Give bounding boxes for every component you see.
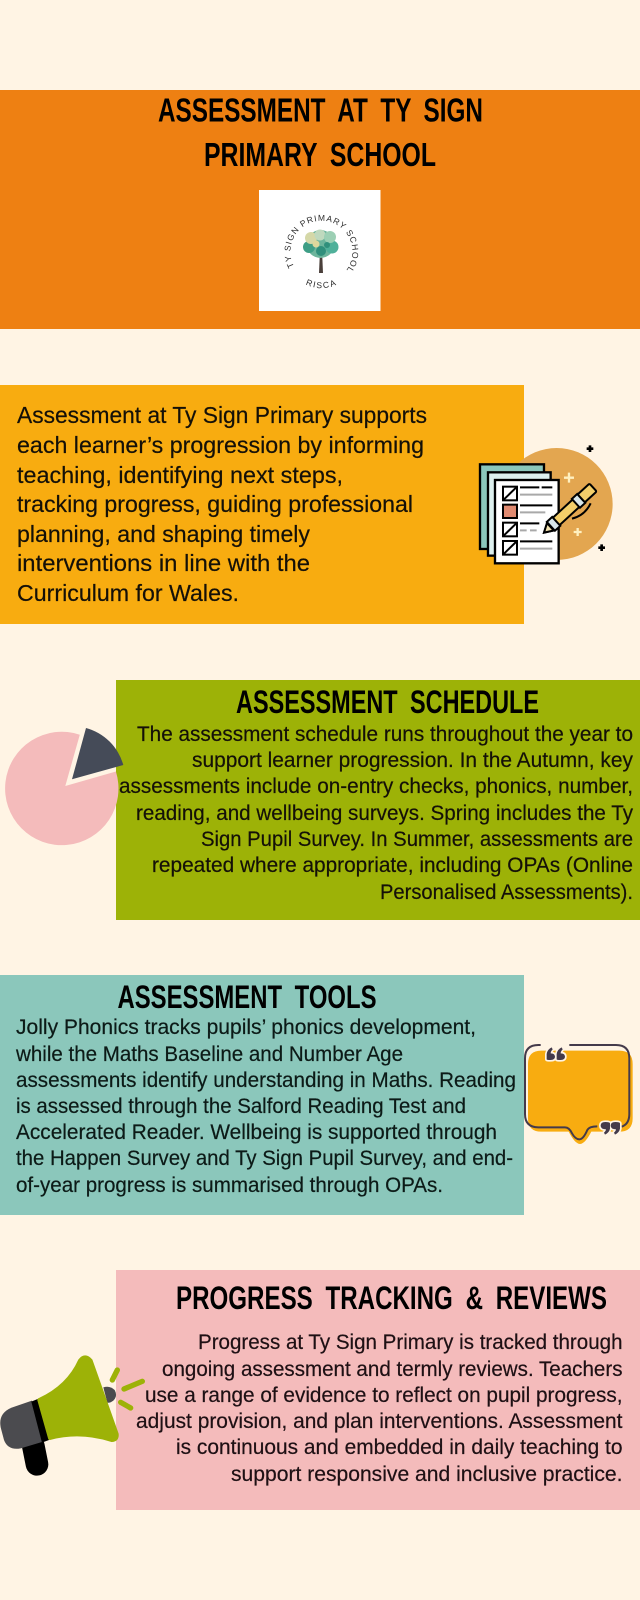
icon: megaphone	[0, 1357, 142, 1464]
tools text: while the Maths Baseline and Number Age	[15, 1043, 403, 1066]
chart: pie chart	[5, 728, 123, 845]
schedule text: assessments include on-entry checks, phonics, number,	[119, 775, 633, 798]
intro text: interventions in line with the	[17, 550, 310, 576]
progress text: adjust provision, and plan interventions. Assessment	[136, 1410, 623, 1433]
icon: tree	[303, 230, 338, 273]
school logo	[259, 190, 380, 311]
title: ASSESSMENT AT TY SIGN	[158, 92, 483, 130]
panel: progress tracking and reviews	[116, 1270, 640, 1510]
schedule text	[119, 723, 633, 904]
intro text: Curriculum for Wales.	[17, 580, 239, 606]
title: PRIMARY SCHOOL	[204, 137, 436, 174]
tools text: Jolly Phonics tracks pupils’ phonics development,	[16, 1016, 476, 1039]
tools text: Accelerated Reader. Wellbeing is supported through	[16, 1121, 497, 1144]
tools text: assessments identify understanding in Maths. Reading	[16, 1069, 516, 1092]
intro text: planning, and shaping timely	[17, 521, 310, 547]
heading: ASSESSMENT TOOLS	[118, 979, 376, 1015]
progress text: is continuous and embedded in daily teaching to	[176, 1436, 622, 1459]
intro text: each learner’s progression by informing	[17, 432, 424, 458]
intro text	[17, 402, 427, 606]
progress text: ongoing assessment and termly reviews. Teachers	[162, 1358, 622, 1381]
school logo: TY SIGN PRIMARY SCHOOL	[284, 214, 358, 270]
schedule text: Personalised Assessments).	[380, 881, 633, 904]
panel: assessment tools	[0, 975, 524, 1215]
panel: assessment schedule	[116, 680, 640, 920]
tools text: is assessed through the Salford Reading Test and	[16, 1095, 466, 1118]
progress text: use a range of evidence to reflect on pupil progress,	[145, 1384, 622, 1407]
tools text	[15, 1016, 516, 1197]
schedule text: The assessment schedule runs throughout the year to	[137, 723, 633, 746]
intro text: Assessment at Ty Sign Primary supports	[17, 402, 427, 428]
schedule text: support learner progression. In the Autumn, key	[192, 749, 633, 772]
panel: title banner	[0, 90, 640, 329]
tools text: of-year progress is summarised through OPAs.	[16, 1174, 443, 1197]
school logo: RISCA	[306, 279, 336, 288]
title	[158, 92, 483, 174]
schedule text: Sign Pupil Survey. In Summer, assessments are	[201, 828, 633, 851]
icon: assessment papers and pen	[480, 445, 613, 563]
panel: introduction	[0, 385, 524, 624]
icon: speech bubble	[525, 1045, 633, 1144]
progress text: support responsive and inclusive practice.	[231, 1463, 622, 1486]
progress text: Progress at Ty Sign Primary is tracked through	[198, 1331, 622, 1354]
intro text: tracking progress, guiding professional	[17, 491, 413, 517]
schedule text: reading, and wellbeing surveys. Spring includes the Ty	[136, 802, 633, 825]
intro text: teaching, identifying next steps,	[17, 462, 343, 488]
heading: ASSESSMENT SCHEDULE	[236, 684, 539, 720]
progress text	[136, 1331, 623, 1486]
tools text: the Happen Survey and Ty Sign Pupil Survey, and end-	[16, 1147, 513, 1170]
schedule text: repeated where appropriate, including OPAs (Online	[152, 854, 633, 877]
